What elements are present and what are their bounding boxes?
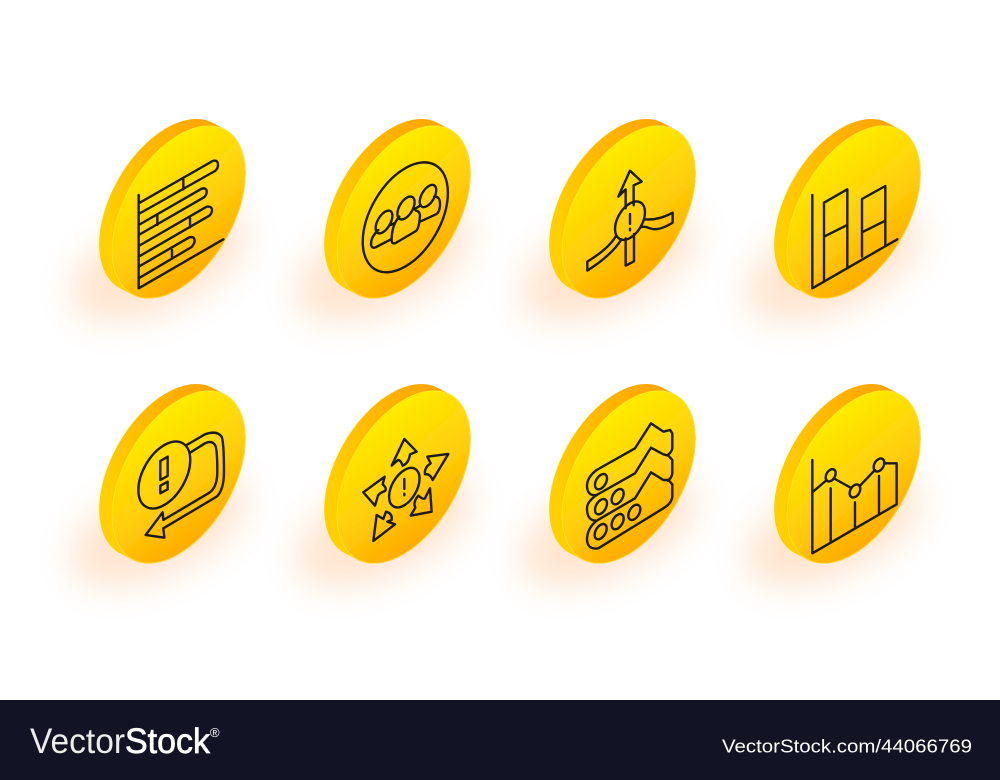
disc: road junction with warning (534, 92, 723, 321)
footer image id: VectorStock.com/44066769 (722, 736, 972, 756)
disc: warning return arrow (84, 357, 273, 586)
disc: arrows spreading outwards (309, 357, 498, 586)
icon: five arrows around exclamation (363, 439, 448, 541)
soft orange shadows under discs (53, 182, 939, 611)
footer logo: ® (210, 725, 220, 740)
footer logo (30, 722, 220, 761)
icon: branching arrows with exclamation (587, 171, 673, 271)
disc: team of people (309, 92, 498, 321)
icon: line graph over columns (812, 457, 897, 553)
icon: exclamation bubble with looping arrow (128, 433, 224, 538)
disc: line and bar chart (759, 357, 948, 586)
footer bar (0, 700, 1000, 780)
icon: three people in a circle (345, 148, 466, 287)
footer logo: Vector (30, 722, 125, 761)
disc: stacked tracks (534, 357, 723, 586)
footer logo: Stock (125, 722, 210, 761)
disc: stacked column chart (759, 92, 948, 321)
icon: three stacked tracks with dots (587, 423, 672, 549)
disc: horizontal stacked bar chart (84, 92, 273, 321)
icon: horizontal bar chart (139, 161, 223, 288)
icon: stacked columns (812, 186, 897, 288)
